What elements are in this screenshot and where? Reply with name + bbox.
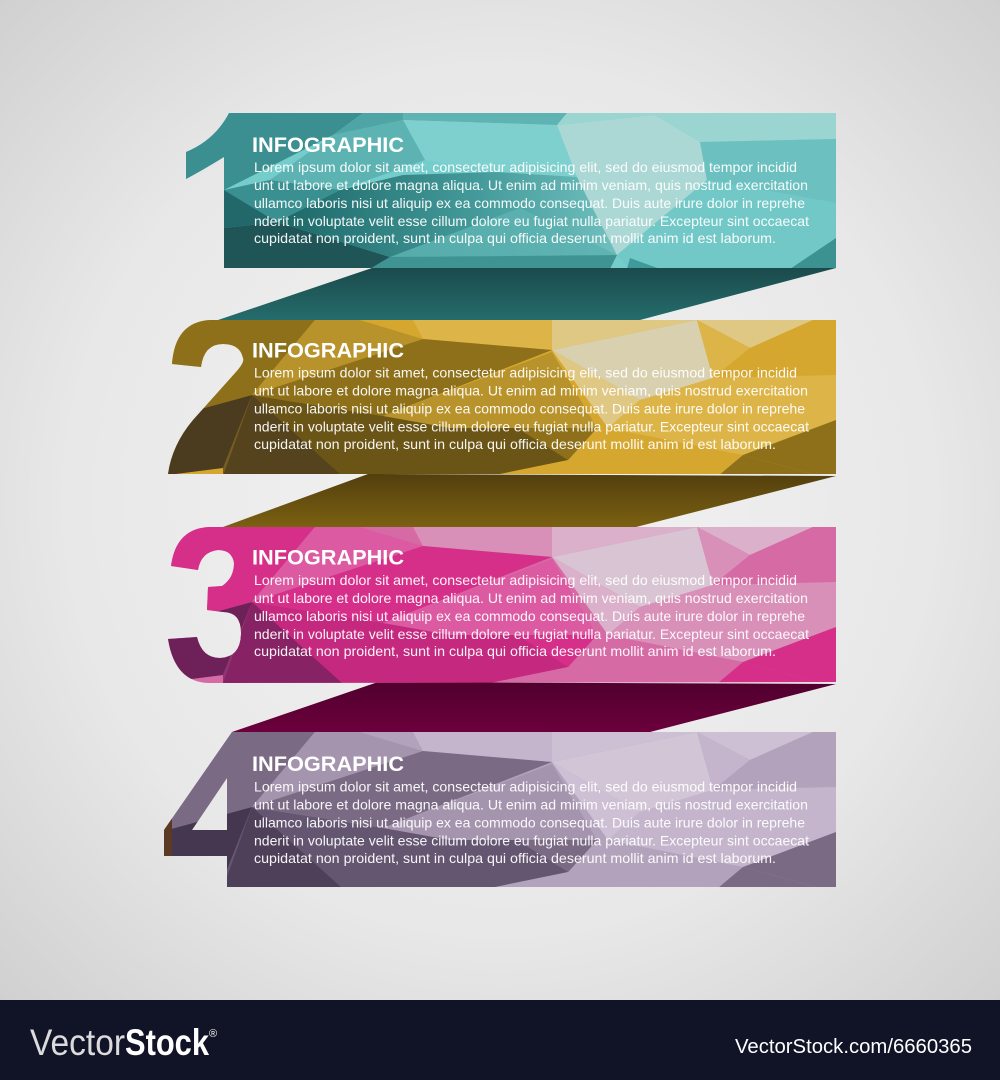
body text 1: cupidatat non proident, sunt in culpa qui officia deserunt mollit anim id est laborum. (254, 230, 776, 246)
ribbon fold 2 (223, 474, 836, 527)
body text 3: nderit in voluptate velit esse cillum dolore eu fugiat nulla pariatur. Excepteur sint occaecat (254, 626, 809, 642)
body text 3: unt ut labore et dolore magna aliqua. Ut enim ad minim veniam, quis nostrud exercitation (254, 590, 808, 606)
footer image id: VectorStock.com/6660365 (735, 1036, 972, 1058)
body text 4: Lorem ipsum dolor sit amet, consectetur adipisicing elit, sed do eiusmod tempor incidid (254, 778, 797, 794)
body text 2: Lorem ipsum dolor sit amet, consectetur adipisicing elit, sed do eiusmod tempor incidid (254, 364, 797, 380)
body text 3: cupidatat non proident, sunt in culpa qui officia deserunt mollit anim id est laborum. (254, 643, 776, 659)
body text 4: nderit in voluptate velit esse cillum dolore eu fugiat nulla pariatur. Excepteur sint occaecat (254, 832, 809, 848)
body text 1: ullamco laboris nisi ut aliquip ex ea commodo consequat. Duis aute irure dolor in reprehe (254, 195, 805, 211)
heading 2: INFOGRAPHIC (252, 340, 404, 362)
low-poly facets 3 (160, 527, 840, 683)
body text 2: cupidatat non proident, sunt in culpa qui officia deserunt mollit anim id est laborum. (254, 436, 776, 452)
heading 3: INFOGRAPHIC (252, 546, 404, 570)
low-poly facets 4 (160, 732, 840, 888)
heading 4: INFOGRAPHIC (252, 753, 404, 776)
body text 2: ullamco laboris nisi ut aliquip ex ea commodo consequat. Duis aute irure dolor in reprehe (254, 400, 805, 416)
body text 2: nderit in voluptate velit esse cillum dolore eu fugiat nulla pariatur. Excepteur sint occaecat (254, 418, 809, 434)
ribbon fold 3 (232, 682, 836, 732)
ribbon fold 1 (218, 268, 836, 320)
panel 3: magenta band with numeral 3 (160, 527, 840, 683)
panel 2: gold band with numeral 2 (160, 320, 840, 476)
footer logo: ® (209, 1028, 217, 1040)
low-poly facets 2 (160, 320, 840, 476)
body text 1: Lorem ipsum dolor sit amet, consectetur adipisicing elit, sed do eiusmod tempor incidid (254, 159, 797, 175)
footer bar (0, 1000, 1000, 1080)
body text 2: unt ut labore et dolore magna aliqua. Ut enim ad minim veniam, quis nostrud exercitation (254, 382, 808, 398)
body text 2 (254, 364, 809, 452)
heading 1: INFOGRAPHIC (252, 134, 404, 157)
panel 1: teal band with numeral 1 (180, 113, 840, 269)
body text 3 (254, 572, 809, 659)
body text 3: Lorem ipsum dolor sit amet, consectetur adipisicing elit, sed do eiusmod tempor incidid (254, 572, 797, 588)
body text 1: nderit in voluptate velit esse cillum dolore eu fugiat nulla pariatur. Excepteur sint occaecat (254, 213, 809, 229)
footer logo: Vector (30, 1022, 125, 1063)
body text 4 (254, 778, 809, 866)
body text 4: unt ut labore et dolore magna aliqua. Ut enim ad minim veniam, quis nostrud exercitation (254, 796, 808, 812)
footer logo: Stock (125, 1022, 209, 1063)
body text 1: unt ut labore et dolore magna aliqua. Ut enim ad minim veniam, quis nostrud exercitation (254, 177, 808, 193)
body text 4: ullamco laboris nisi ut aliquip ex ea commodo consequat. Duis aute irure dolor in reprehe (254, 814, 805, 830)
panel 4: purple band with numeral 4 (160, 732, 840, 888)
body text 3: ullamco laboris nisi ut aliquip ex ea commodo consequat. Duis aute irure dolor in reprehe (254, 608, 805, 624)
body text 4: cupidatat non proident, sunt in culpa qui officia deserunt mollit anim id est laborum. (254, 850, 776, 866)
low-poly facets 1 (180, 113, 840, 269)
footer logo (30, 1022, 217, 1063)
body text 1 (254, 159, 809, 246)
